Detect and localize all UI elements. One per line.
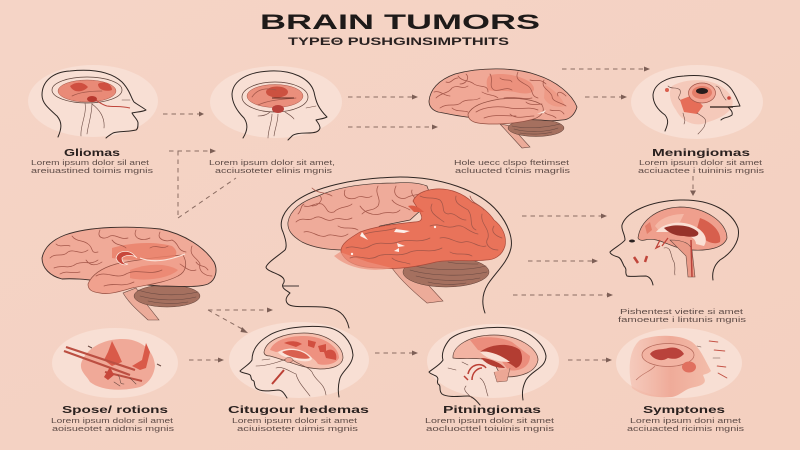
panel: second head — [209, 66, 342, 175]
left brain illustration — [42, 227, 216, 320]
symptones text: Lorem ipsum doni amet — [630, 416, 741, 425]
arrow: left brain to citugour — [208, 310, 248, 333]
right head text: famoeurte i lintunis mgnis — [618, 315, 746, 324]
panel: right head — [610, 200, 746, 324]
pitningiomas text — [425, 416, 554, 433]
panel: pitningiomas — [425, 324, 559, 433]
meningiomas text: Lorem ipsum dolor sit amet — [639, 158, 762, 167]
arrow: vertical connector — [177, 151, 179, 218]
citugour hedemas text — [232, 416, 358, 433]
arrow: top brain to meningiomas upper — [562, 66, 650, 72]
arrow: left brain to central head — [208, 308, 273, 312]
panel: gliomas — [28, 65, 158, 175]
top brain illustration — [429, 69, 577, 148]
panel: citugour hedemas — [228, 322, 369, 433]
meningiomas heading: Meningiomas — [652, 147, 750, 159]
right head icon — [610, 200, 739, 285]
arrow: gliomas caption right — [169, 148, 216, 154]
meningiomas text: acciuactee i tuininis mgnis — [638, 166, 764, 175]
panel: top brain — [429, 69, 577, 175]
arrow: central brain to right text — [513, 292, 613, 298]
citugour hedemas heading: Citugour hedemas — [228, 404, 369, 416]
spose rotions text: aoisueotet anidmis mgnis — [52, 424, 174, 433]
brain: healthy region — [288, 183, 432, 250]
gliomas heading: Gliomas — [64, 147, 120, 159]
spose rotions heading: Spose/ rotions — [62, 404, 168, 416]
lip line — [283, 285, 299, 287]
arrow: pitningiomas to symptones — [568, 358, 612, 362]
citugour hedemas text: aciuisoteter uimis mgnis — [237, 424, 358, 433]
arrow: gliomas to second head — [163, 112, 204, 116]
central head outline — [266, 177, 511, 328]
symptones text — [627, 416, 744, 433]
top brain text: acluucted ťcinis magrlis — [455, 166, 570, 175]
second head text — [209, 158, 335, 175]
subtitle: TYPEΘ PUSHGINSIMPTHITS — [288, 36, 509, 48]
meningiomas head icon — [631, 65, 763, 139]
gliomas text: areiuastined toimis mgnis — [31, 166, 153, 175]
title: BRAIN TUMORS — [260, 11, 540, 34]
arrow: second head to top brain lower — [348, 124, 438, 130]
spose rotions icon — [52, 328, 178, 398]
second head icon — [210, 66, 342, 140]
pitningiomas heading: Pitningiomas — [443, 404, 541, 416]
pitningiomas text: aocluocttel toiuinis mgnis — [426, 424, 554, 433]
arrow: diagonal connector — [178, 178, 236, 218]
right head text: Pishentest vietire si amet — [620, 307, 743, 316]
spose rotions text — [51, 416, 174, 433]
spose rotions text: Lorem ipsum dolor sil amet — [51, 416, 173, 425]
citugour hedemas text: Lorem ipsum dolor sit amet — [232, 416, 357, 425]
panel: spose rotions — [51, 328, 178, 433]
pitningiomas icon — [427, 324, 559, 405]
gliomas text — [31, 158, 153, 175]
right head text — [618, 307, 746, 324]
gliomas head icon — [28, 65, 158, 138]
top brain text: Hole uecc clspo ftetimset — [454, 158, 569, 167]
arrow: second head to top brain upper — [348, 94, 418, 100]
arrow: spose to citugour — [189, 358, 224, 362]
arrow: central brain to right head middle — [528, 258, 598, 264]
second head text: acciusoteter elinis mgnis — [215, 166, 332, 175]
second head text: Lorem ipsum dolor sit amet, — [209, 158, 335, 167]
arrow: central brain to right head upper — [522, 214, 607, 218]
central head with large brain — [266, 177, 511, 328]
arrow: top brain to meningiomas lower — [585, 94, 627, 100]
arrow: citugour to pitningiomas — [375, 350, 418, 356]
panel: left brain — [42, 227, 216, 320]
panel: meningiomas — [631, 65, 764, 175]
pitningiomas text: Lorem ipsum dolor sit amet — [425, 416, 554, 425]
brain stem — [390, 262, 443, 303]
gliomas text: Lorem ipsum dolor sil anet — [31, 158, 149, 167]
arrow: meningiomas down — [690, 176, 696, 196]
symptones heading: Symptones — [643, 404, 725, 416]
symptones text: acciuacted ricimis mgnis — [627, 424, 744, 433]
symptones icon — [616, 328, 742, 398]
panel: symptones — [616, 328, 744, 433]
cerebellum — [403, 257, 489, 287]
brain: tumor region — [334, 189, 505, 270]
citugour hedemas icon — [229, 322, 369, 398]
top brain text — [454, 158, 570, 175]
meningiomas text — [638, 158, 764, 175]
